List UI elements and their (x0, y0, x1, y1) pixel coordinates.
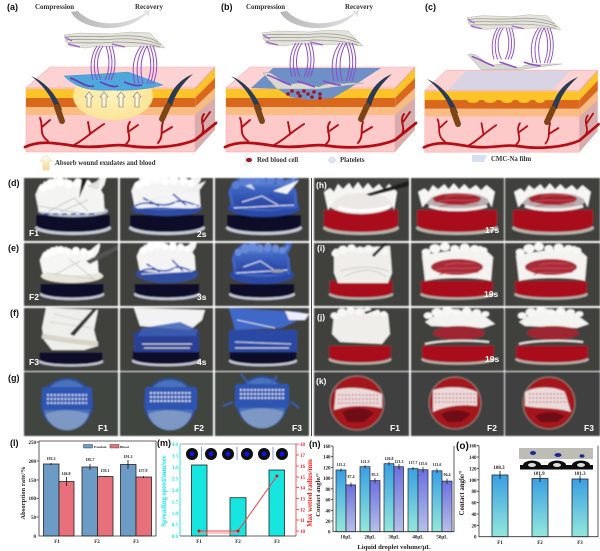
left tick labels m: 0.0 (172, 535, 178, 540)
panel a: wound exudate absorption schematic (7, 2, 216, 170)
tick labels n: 40 (326, 509, 331, 514)
tick labels o: 120 (469, 467, 477, 472)
arrow: compression to recovery a (71, 10, 150, 28)
y axis title o: Contact angle/° (459, 470, 466, 515)
tick labels o: 100 (469, 479, 477, 484)
value labels o: 101.3 (574, 472, 586, 477)
tick labels o: 0 (474, 536, 477, 541)
panel c: CMC-Na film schematic (424, 2, 599, 163)
x labels l (54, 540, 139, 545)
error bars l (51, 460, 144, 486)
x labels o: F3 (577, 541, 583, 546)
tick labels l: 100 (28, 497, 36, 502)
x labels l: F3 (133, 540, 139, 545)
x labels m: F3 (274, 540, 280, 545)
tick labels o: 40 (472, 513, 477, 518)
photo k2 (410, 371, 505, 437)
x labels m: F1 (196, 540, 202, 545)
tick labels n: 80 (326, 488, 331, 493)
photo captions: F3 (292, 423, 302, 433)
bars n (336, 464, 452, 532)
upper scaffold sheet a (64, 32, 165, 48)
bars l (44, 464, 152, 536)
tick labels o: 140 (469, 456, 477, 461)
value labels n: 115.6 (419, 461, 427, 466)
photo f2 (119, 307, 214, 372)
y axis title left m: Spreading speed/mm/sec (161, 455, 168, 527)
panel label a: (a) (7, 2, 18, 12)
tick labels o: 60 (472, 502, 477, 507)
photo captions: F1 (98, 423, 108, 433)
x labels m: F2 (235, 540, 241, 545)
value labels l: 193.3 (46, 456, 56, 461)
value labels o: 108.3 (493, 466, 505, 471)
y axis title n: Contact angle/° (315, 473, 322, 517)
legend platelet (328, 157, 336, 163)
yellow healed bumps (467, 97, 545, 103)
lower scaffold b (263, 72, 364, 89)
compression label a: Compression (35, 3, 74, 11)
legend l: Blood (120, 445, 129, 449)
value labels l: 146.8 (62, 471, 70, 476)
photo j1 (312, 307, 410, 372)
row labels d to g (8, 178, 20, 383)
value labels n: 87.4 (348, 474, 354, 479)
photo d2 (119, 176, 214, 242)
tick labels n: 120 (323, 466, 331, 471)
photo captions (29, 180, 594, 433)
right tick labels m: 18 (300, 443, 306, 448)
x labels m (196, 540, 280, 545)
hair left b (231, 76, 262, 121)
photo captions: 19s (484, 289, 498, 299)
scaffold coils c (492, 28, 553, 63)
bars m (192, 465, 284, 536)
x labels o (497, 541, 583, 546)
legend red cell (246, 158, 252, 162)
value labels l: 159.1 (100, 468, 110, 473)
skin block c (424, 70, 599, 152)
photo captions: F1 (390, 423, 400, 433)
photo e2 (119, 242, 214, 307)
x labels n: 40μL (412, 536, 424, 540)
line series m (198, 474, 278, 533)
photo grid: blue exudate absorption (24, 172, 309, 436)
hair left a (31, 76, 62, 121)
axes l (36, 441, 156, 536)
photo d3 (214, 176, 310, 242)
value labels o: 101.9 (533, 472, 545, 477)
legend arrow a (40, 155, 52, 170)
photo captions: 4s (197, 357, 207, 367)
legend text film: CMC-Na film (491, 156, 532, 163)
left tick labels m: 3.0 (172, 466, 178, 471)
x labels n: 30μL (388, 536, 400, 540)
tick labels l: 0 (34, 535, 36, 540)
photo h1 (312, 176, 410, 242)
tick labels n (323, 445, 331, 536)
panel label n: (n) (309, 439, 320, 449)
wound exudate pool (73, 72, 153, 120)
left tick labels m: 4.0 (172, 443, 178, 448)
right tick labels m: 10 (300, 530, 306, 535)
value labels n: 95.3 (372, 472, 378, 477)
tick labels n: 160 (323, 445, 331, 450)
hair right c (547, 77, 578, 122)
photo captions: F3 (584, 423, 594, 433)
bars o (492, 475, 588, 537)
photo captions: (h) (316, 180, 327, 190)
photo captions: F1 (29, 228, 39, 238)
value labels l: 191.3 (124, 454, 132, 459)
tick labels l (28, 441, 36, 540)
left tick labels m: 1.0 (172, 512, 178, 517)
upper scaffold sheet c (467, 15, 561, 30)
recovery label a: Recovery (135, 3, 163, 11)
x axis title n: Liquid droplet volume/μL (357, 544, 431, 551)
photo j3 (504, 307, 600, 372)
photo captions: 17s (485, 225, 499, 235)
photo captions: 2s (197, 229, 207, 239)
photo captions: (j) (317, 312, 325, 322)
left tick labels m: 2.0 (172, 489, 178, 494)
right tick labels m: 13 (300, 498, 306, 502)
value labels o (493, 466, 586, 477)
x labels o: F1 (497, 541, 503, 546)
panel label o: (o) (456, 441, 469, 452)
left tick labels m: 3.5 (172, 454, 178, 460)
tick labels o: 160 (469, 445, 477, 450)
photo i3 (504, 242, 600, 307)
right tick labels m: 11 (300, 519, 305, 524)
scaffold coils b (290, 43, 356, 81)
tick labels o: 20 (472, 524, 477, 529)
photo i2 (410, 242, 505, 307)
photo captions: F2 (194, 423, 204, 433)
left tick labels m (172, 443, 178, 540)
panel label b: (b) (221, 2, 232, 12)
tick labels l: 250 (28, 441, 36, 446)
value labels n: 113.6 (433, 462, 441, 467)
chart o: contact angle of F1 to F3 (456, 441, 598, 546)
legend l (84, 444, 129, 449)
row labels d to g: (d) (8, 178, 20, 188)
inset: contact angle image (520, 460, 593, 470)
right tick labels m: 17 (300, 454, 306, 459)
recovery label b: Recovery (345, 3, 373, 11)
tick labels n: 0 (328, 531, 331, 536)
photo i1 (312, 242, 410, 308)
row labels d to g: (g) (8, 373, 20, 383)
photo g3 (214, 371, 310, 437)
value labels n: 121.3 (360, 459, 370, 464)
value labels n: 117.7 (409, 460, 417, 465)
tick labels n: 100 (323, 477, 331, 482)
chart n: contact angle versus droplet volume (309, 439, 454, 551)
axes n (331, 446, 454, 532)
right tick labels m: 15 (300, 476, 306, 481)
upper scaffold sheet b (262, 30, 363, 46)
photo captions: 3s (197, 292, 207, 302)
purple detail on scaffold a (70, 78, 142, 87)
x labels n: 20μL (364, 536, 376, 540)
right tick labels m (300, 443, 306, 535)
photo g1 (23, 371, 119, 437)
tick labels o (469, 445, 477, 541)
compression label b: Compression (246, 3, 285, 11)
photo j2 (410, 307, 505, 372)
panel b: hemostasis schematic (221, 2, 416, 164)
absorbent blue scaffold base (64, 72, 163, 90)
axes o (477, 446, 598, 537)
legend text red cell: Red blood cell (257, 157, 298, 164)
left tick labels m: 1.5 (172, 500, 178, 506)
x labels n (340, 536, 448, 540)
left tick labels m: 2.5 (172, 478, 178, 482)
photo grid: red blood absorption (314, 178, 600, 436)
x labels n: 10μL (340, 536, 352, 540)
photo k1 (313, 371, 410, 437)
value labels l: 185.7 (86, 457, 94, 462)
left tick labels m: 0.5 (172, 524, 178, 528)
photo h2 (410, 176, 505, 242)
panel label l: (l) (10, 438, 18, 448)
photo captions: 19s (485, 354, 499, 364)
up arrows (85, 92, 141, 107)
tick labels n: 20 (326, 520, 331, 525)
value labels l (46, 454, 148, 476)
tick labels l: 150 (28, 479, 36, 484)
value labels n: 115.2 (337, 462, 345, 467)
photo captions: F2 (487, 423, 497, 433)
panel label c: (c) (425, 2, 436, 12)
hair right a (162, 74, 193, 119)
right tick labels m: 14 (300, 486, 306, 492)
tick labels l: 50 (31, 516, 36, 521)
photo e1 (22, 242, 119, 307)
divider between blue and red photo grids (311, 178, 312, 436)
photo k3 (504, 371, 600, 437)
error bars o (500, 471, 580, 482)
row labels d to g: (f) (10, 308, 19, 318)
value labels l: 157.9 (138, 468, 148, 473)
panel label m: (m) (157, 438, 171, 448)
photo e3 (214, 242, 310, 307)
x labels l: F2 (94, 540, 100, 545)
row labels d to g: (e) (8, 243, 19, 253)
x labels l: F1 (54, 540, 60, 545)
photo d1 (22, 176, 119, 242)
value labels n: 121.3 (394, 459, 404, 464)
value labels n: 126.8 (384, 456, 394, 461)
right tick labels m: 12 (300, 508, 306, 514)
chart l: absorption rate (10, 438, 156, 545)
blue film over wound (251, 68, 381, 100)
tick labels o: 80 (472, 490, 477, 495)
legend l: Exudate (94, 445, 107, 449)
y axis title l: Absorption rate/% (20, 466, 27, 520)
x labels n: 50μL (436, 536, 448, 540)
photo f3 (214, 307, 310, 372)
legend text a: Absorb wound exudates and blood (55, 160, 156, 167)
hair right b (361, 74, 392, 119)
x labels o: F2 (537, 541, 543, 546)
tick labels n: 60 (326, 498, 331, 504)
legend film swatch (472, 155, 487, 162)
photo captions: (k) (316, 376, 327, 386)
droplet images m (186, 447, 288, 460)
skin block a (25, 67, 216, 152)
chart m: spreading speed and wetted radius (157, 438, 314, 545)
value labels n: 94.4 (444, 472, 450, 477)
scaffold coils a (91, 46, 157, 84)
lower scaffold c (468, 54, 562, 70)
error bars n (341, 462, 447, 487)
photo captions: F2 (29, 292, 39, 302)
photo h3 (504, 176, 600, 242)
inset: droplet photo (519, 448, 593, 459)
photo captions: F3 (29, 357, 39, 367)
skin block b (225, 67, 416, 152)
CMC-Na film on skin (448, 71, 570, 90)
tick labels l: 200 (28, 460, 36, 465)
photo captions: (i) (317, 243, 325, 253)
legend text platelets: Platelets (340, 157, 365, 164)
tick labels n: 140 (323, 456, 331, 461)
photo f1 (22, 307, 119, 372)
right tick labels m: 16 (300, 465, 306, 470)
red blood cells (286, 89, 322, 100)
y axis title right m: Max wetted radius/mm (307, 459, 314, 527)
arrow: compression to recovery b (280, 10, 359, 28)
hair left c (427, 79, 458, 124)
axes m (180, 443, 296, 445)
value labels n (337, 456, 450, 479)
photo g2 (119, 371, 214, 437)
